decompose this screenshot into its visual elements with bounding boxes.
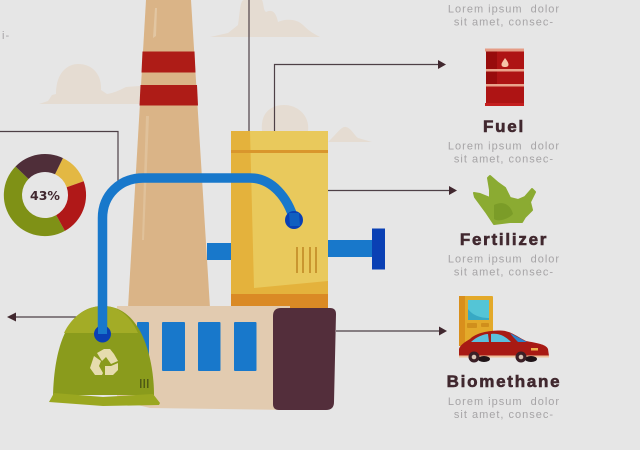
heading: Biomethane: Biomethane xyxy=(447,372,561,391)
blue side pipe with flange xyxy=(328,228,385,270)
blue connector stub left of tank xyxy=(207,243,231,260)
cropped text fragment: i- xyxy=(2,30,10,42)
green digester dome xyxy=(49,306,160,406)
donut chart xyxy=(4,154,86,236)
dome vents xyxy=(140,379,148,388)
fuel pump xyxy=(459,296,493,346)
yellow tank xyxy=(231,131,328,308)
maroon block xyxy=(273,308,336,410)
heading: Fuel: Fuel xyxy=(483,117,525,136)
icon: recycle xyxy=(90,349,118,375)
text: biomethane description: Lorem ipsum dolor xyxy=(448,396,560,408)
text: biomethane description: sit amet, consec- xyxy=(454,409,554,421)
cloud: top xyxy=(210,0,320,37)
icon: fertilizer leaves xyxy=(474,176,535,224)
arrow: to fuel xyxy=(274,60,446,131)
icon: fuel barrel xyxy=(485,48,524,106)
factory building xyxy=(117,306,336,410)
arrow: to biomethane xyxy=(336,326,447,336)
icon: fuel pump and car xyxy=(459,296,549,362)
blue process pipe xyxy=(94,178,303,342)
text: biomethane description xyxy=(448,396,560,421)
arrow: to left xyxy=(7,312,80,322)
arrow: to fertilizer xyxy=(328,186,457,195)
text: fuel description xyxy=(448,140,560,166)
cloud: left xyxy=(39,64,140,104)
chimney xyxy=(128,0,210,308)
connector line: top-left to chart xyxy=(0,132,118,184)
donut value: 43% xyxy=(30,188,60,203)
chimney stripes xyxy=(140,52,198,106)
cloud: behind tank xyxy=(262,105,372,142)
top text block: Lorem ipsum dolor xyxy=(448,4,560,16)
connector line: from top to tank xyxy=(248,0,250,131)
top text block: sit amet, consec- xyxy=(454,16,554,28)
windows xyxy=(137,322,256,371)
text: fertilizer description xyxy=(448,254,560,278)
text: fuel description: sit amet, consec- xyxy=(454,154,554,166)
text: fertilizer description: Lorem ipsum dolor xyxy=(448,254,560,266)
text: fuel description: Lorem ipsum dolor xyxy=(448,140,560,152)
text: fertilizer description: sit amet, consec- xyxy=(454,266,554,278)
tank vents xyxy=(296,247,317,273)
top text block xyxy=(448,4,560,28)
heading: Fertilizer: Fertilizer xyxy=(460,230,548,249)
car xyxy=(459,330,549,362)
